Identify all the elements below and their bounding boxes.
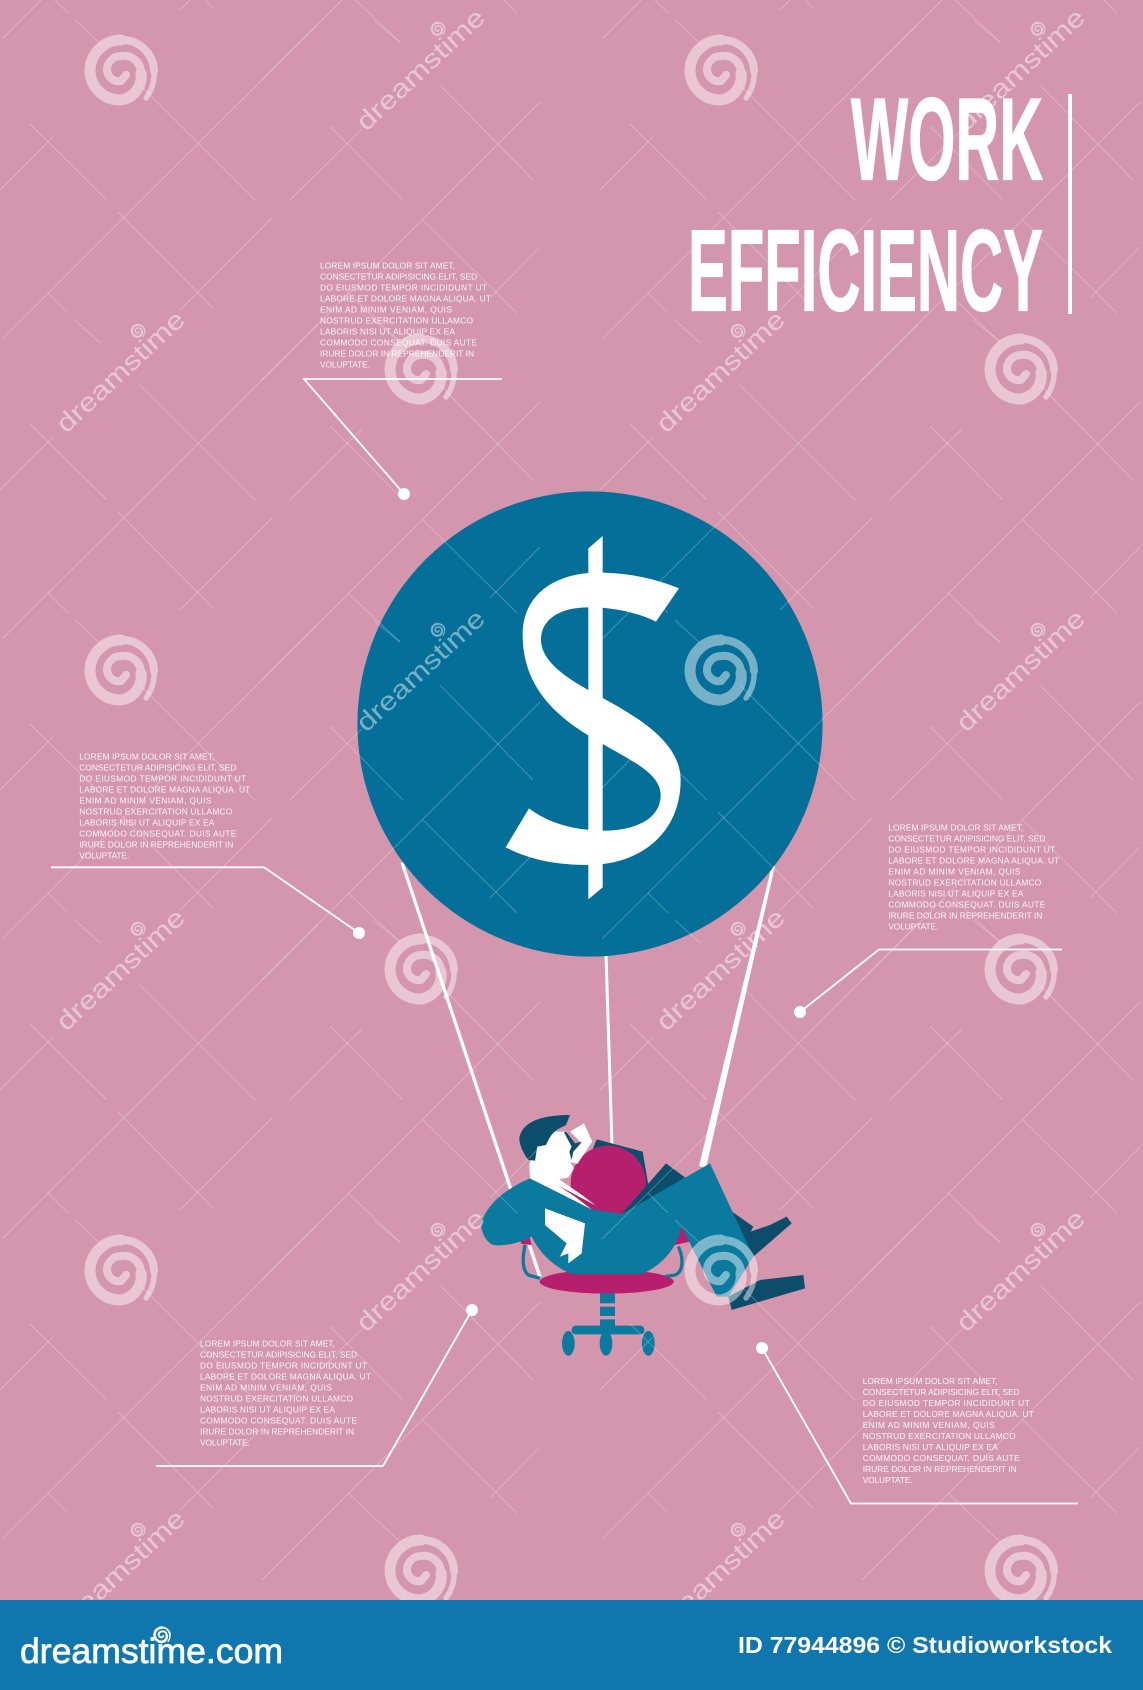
callout 4 text: VOLUPTATE. [200, 1438, 250, 1448]
callout 2 text [79, 751, 250, 860]
callout 3 text: LABORE ET DOLORE MAGNA ALIQUA. UT [888, 856, 1059, 866]
callout 4 text: IRURE DOLOR IN REPREHENDERIT IN [200, 1427, 354, 1437]
callout 3 text: COMMODO CONSEQUAT. DUIS AUTE [888, 900, 1046, 910]
callout 1 text: NOSTRUD EXERCITATION ULLAMCO [320, 315, 473, 325]
balloon ropes [400, 862, 775, 1278]
footer bar [0, 1600, 1143, 1690]
callout 2 text: DO EIUSMOD TEMPOR INCIDIDUNT UT [79, 773, 246, 783]
shoes [725, 1207, 805, 1310]
callout 4 [156, 1304, 478, 1466]
callout 2 text: COMMODO CONSEQUAT. DUIS AUTE [79, 828, 237, 838]
balloon circle [357, 491, 823, 957]
callout 1 text: LABORE ET DOLORE MAGNA ALIQUA. UT [320, 293, 491, 303]
callout 3 text: CONSECTETUR ADIPISICING ELIT, SED [888, 834, 1045, 844]
callout 4 text [200, 1339, 371, 1448]
callout 5 text: IRURE DOLOR IN REPREHENDERIT IN [863, 1464, 1017, 1474]
folded jacket flap [622, 1163, 685, 1214]
callout 1 text: DO EIUSMOD TEMPOR INCIDIDUNT UT [320, 282, 487, 292]
callout 1 text: ENIM AD MINIM VENIAM, QUIS [320, 304, 452, 314]
head and shirt [529, 1132, 595, 1209]
callout 2 text: LABORE ET DOLORE MAGNA ALIQUA. UT [79, 784, 250, 794]
callout 2 [51, 751, 365, 939]
callout 3 text: LABORIS NISI UT ALIQUIP EX EA [888, 889, 1024, 899]
resting hand [545, 1208, 585, 1263]
chair seat and base [540, 1270, 674, 1356]
chair armrests [517, 1227, 690, 1278]
callout 2 text: VOLUPTATE. [79, 850, 129, 860]
callout 1 [304, 260, 502, 500]
footer image id and credit: ID 77944896 © Studioworkstock [738, 1632, 1113, 1658]
callout 2 text: CONSECTETUR ADIPISICING ELIT, SED [79, 762, 236, 772]
callout 4 text: LABORE ET DOLORE MAGNA ALIQUA. UT [200, 1372, 371, 1382]
callout 5 [756, 1342, 1078, 1504]
callout 3 text: IRURE DOLOR IN REPREHENDERIT IN [888, 911, 1042, 921]
callout 4 leader [156, 1304, 478, 1466]
callout 1 text: COMMODO CONSEQUAT. DUIS AUTE [320, 337, 477, 347]
callout 1 text: LABORIS NISI UT ALIQUIP EX EA [320, 326, 455, 336]
dollar sign [506, 536, 681, 899]
watermark spirals [90, 40, 1054, 1600]
callout 3 text: LOREM IPSUM DOLOR SIT AMET, [888, 823, 1023, 833]
phone and raised hand [564, 1123, 592, 1164]
callout 1 text: CONSECTETUR ADIPISICING ELIT, SED [320, 271, 477, 281]
callout 4 text: ENIM AD MINIM VENIAM, QUIS [200, 1383, 332, 1393]
callout 5 text: NOSTRUD EXERCITATION ULLAMCO [863, 1431, 1016, 1441]
callout 4 text: CONSECTETUR ADIPISICING ELIT, SED [200, 1350, 357, 1360]
callout 5 text: LOREM IPSUM DOLOR SIT AMET, [863, 1376, 998, 1386]
callout 4 text: LOREM IPSUM DOLOR SIT AMET, [200, 1339, 335, 1349]
callout 3 leader [794, 950, 1062, 1018]
callout 5 text: CONSECTETUR ADIPISICING ELIT, SED [863, 1387, 1020, 1397]
dollar balloon [357, 491, 823, 957]
hair [519, 1115, 570, 1161]
callout 5 text: LABORIS NISI UT ALIQUIP EX EA [863, 1442, 998, 1452]
callout 5 text: ENIM AD MINIM VENIAM, QUIS [863, 1420, 995, 1430]
callout 2 text: IRURE DOLOR IN REPREHENDERIT IN [79, 839, 233, 849]
title divider [1068, 94, 1072, 314]
callout 3 text: ENIM AD MINIM VENIAM, QUIS [888, 867, 1021, 877]
callout 2 text: LOREM IPSUM DOLOR SIT AMET, [79, 751, 214, 761]
callout 2 text: ENIM AD MINIM VENIAM, QUIS [79, 795, 212, 805]
callout 1 text [320, 260, 491, 369]
callout 5 text [863, 1376, 1034, 1485]
callout 3 [794, 823, 1062, 1018]
callout 1 text: VOLUPTATE. [320, 359, 370, 369]
callout 3 text [888, 823, 1059, 932]
callout 1 text: LOREM IPSUM DOLOR SIT AMET, [320, 260, 455, 270]
callout 4 text: NOSTRUD EXERCITATION ULLAMCO [200, 1394, 353, 1404]
businessman reclining in office chair [481, 1115, 805, 1356]
callout 3 text: NOSTRUD EXERCITATION ULLAMCO [888, 878, 1042, 888]
callout 5 text: COMMODO CONSEQUAT. DUIS AUTE [863, 1453, 1020, 1463]
callout 4 text: LABORIS NISI UT ALIQUIP EX EA [200, 1405, 335, 1415]
callout 1 text: IRURE DOLOR IN REPREHENDERIT IN [320, 348, 474, 358]
tie [558, 1186, 596, 1210]
chair back [577, 1139, 648, 1214]
chair cushion [571, 1146, 646, 1221]
callout 3 text: VOLUPTATE. [888, 922, 938, 932]
callout 4 text: DO EIUSMOD TEMPOR INCIDIDUNT UT [200, 1361, 367, 1371]
callout 3 text: DO EIUSMOD TEMPOR INCIDIDUNT UT [888, 845, 1055, 855]
callout 2 leader [51, 867, 365, 939]
callout 5 text: LABORE ET DOLORE MAGNA ALIQUA. UT [863, 1409, 1034, 1419]
footer logo: dreamstime.com [20, 1632, 283, 1671]
body in suit [481, 1163, 753, 1297]
callout 1 leader [304, 379, 502, 500]
callout 5 text: VOLUPTATE. [863, 1475, 913, 1485]
callout 5 leader [756, 1342, 1078, 1504]
callout 2 text: LABORIS NISI UT ALIQUIP EX EA [79, 817, 215, 827]
callout 2 text: NOSTRUD EXERCITATION ULLAMCO [79, 806, 233, 816]
title [688, 74, 1043, 336]
callout 4 text: COMMODO CONSEQUAT. DUIS AUTE [200, 1416, 357, 1426]
callout 5 text: DO EIUSMOD TEMPOR INCIDIDUNT UT [863, 1398, 1030, 1408]
